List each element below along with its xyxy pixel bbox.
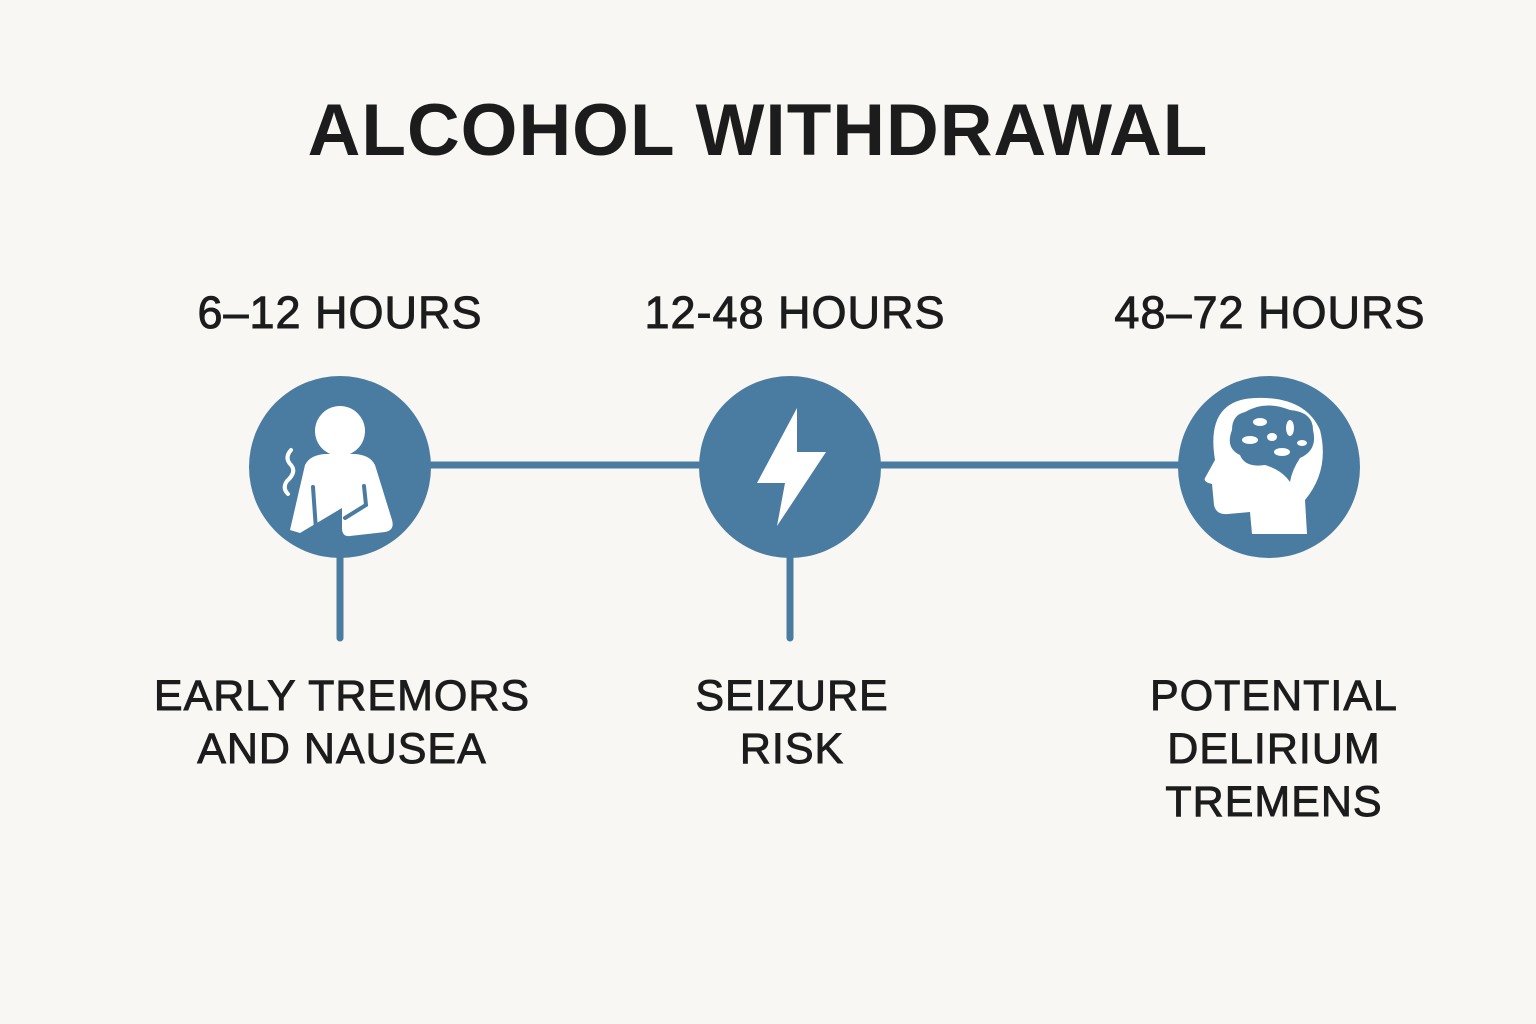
description labels: DELIRIUM xyxy=(1167,725,1381,773)
timeline connector xyxy=(340,465,1190,638)
description labels: RISK xyxy=(740,725,844,773)
time labels: 6–12 HOURS xyxy=(197,287,483,338)
description labels: SEIZURE xyxy=(695,672,889,720)
time labels xyxy=(197,287,1426,338)
description labels: AND NAUSEA xyxy=(197,725,487,773)
icon: head with brain xyxy=(1178,376,1360,558)
description labels: EARLY TREMORS xyxy=(154,672,530,720)
icon: person with tremor xyxy=(249,376,431,558)
description labels xyxy=(154,672,1398,826)
description labels: POTENTIAL xyxy=(1150,672,1398,720)
title: ALCOHOL WITHDRAWAL xyxy=(308,90,1208,171)
time labels: 12-48 HOURS xyxy=(644,287,946,338)
description labels: TREMENS xyxy=(1165,778,1383,826)
time labels: 48–72 HOURS xyxy=(1114,287,1426,338)
icon: lightning bolt xyxy=(699,376,881,558)
